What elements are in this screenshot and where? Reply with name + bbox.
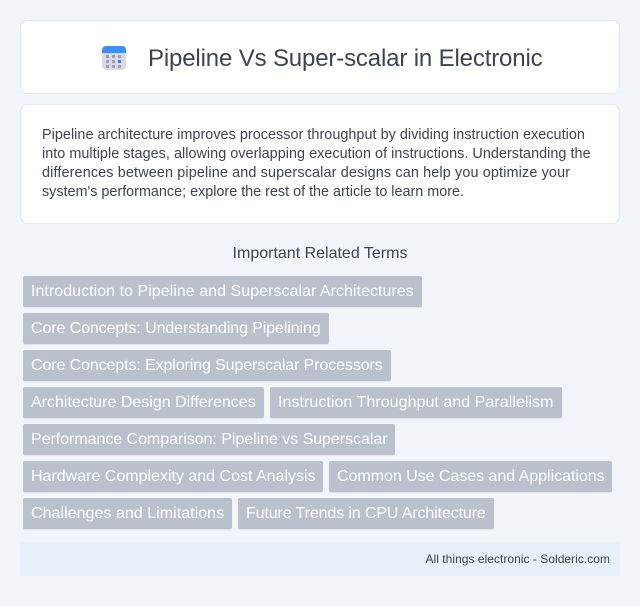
section heading: Important Related Terms	[233, 245, 407, 262]
footer bar	[20, 542, 620, 576]
tag	[329, 461, 612, 492]
intro paragraph: Pipeline architecture improves processor throughput by dividing instruction execution	[42, 127, 585, 143]
tag: Introduction to Pipeline and Superscalar Architectures	[31, 283, 414, 300]
tag	[23, 350, 391, 381]
tag	[23, 387, 264, 418]
tag	[23, 313, 329, 344]
tag: Common Use Cases and Applications	[337, 468, 605, 485]
intro paragraph	[42, 127, 591, 200]
tag list	[23, 276, 612, 530]
tag	[23, 461, 323, 492]
intro paragraph: system's performance; explore the rest of the article to learn more.	[42, 184, 464, 200]
intro paragraph: differences between pipeline and superscalar designs can help you optimize your	[42, 165, 570, 181]
header panel	[20, 20, 620, 94]
tag	[23, 498, 232, 529]
title: Pipeline Vs Super-scalar in Electronic	[148, 45, 542, 72]
tag: Challenges and Limitations	[31, 505, 224, 522]
tag: Performance Comparison: Pipeline vs Superscalar	[31, 431, 388, 448]
tag: Architecture Design Differences	[31, 394, 256, 411]
tag: Core Concepts: Exploring Superscalar Processors	[31, 357, 383, 374]
tag	[270, 387, 562, 418]
tag: Hardware Complexity and Cost Analysis	[31, 468, 316, 485]
intro text panel	[20, 104, 620, 224]
tag: Instruction Throughput and Parallelism	[278, 394, 554, 411]
tag	[23, 424, 395, 455]
icon: calendar	[102, 46, 126, 70]
tag	[238, 498, 494, 529]
footer credit: All things electronic - Solderic.com	[426, 552, 610, 566]
tag	[23, 276, 422, 307]
tag: Future Trends in CPU Architecture	[246, 505, 486, 522]
tag: Core Concepts: Understanding Pipelining	[31, 320, 321, 337]
intro paragraph: into multiple stages, allowing overlapping execution of instructions. Understanding the	[42, 146, 591, 162]
